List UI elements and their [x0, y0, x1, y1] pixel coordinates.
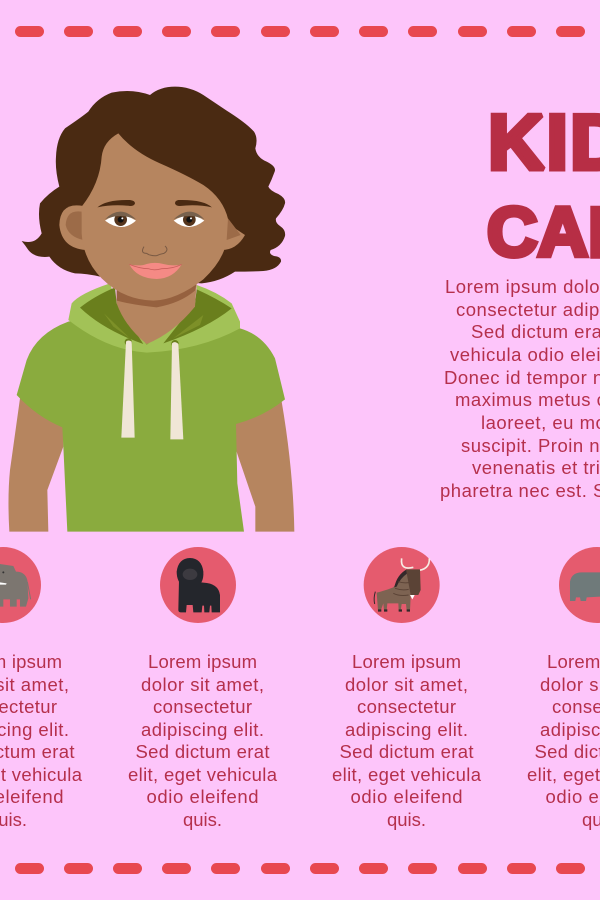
caption: wildebeest: quis. — [387, 809, 426, 830]
caption: gorilla: consectetur — [153, 696, 252, 717]
caption: wildebeest: elit, eget vehicula — [332, 764, 482, 785]
head — [22, 87, 285, 301]
caption: gorilla: dolor sit amet, — [141, 674, 264, 695]
caption: elephant — [0, 651, 83, 830]
caption: wildebeest: Lorem ipsum — [352, 651, 461, 672]
bottom dashed border — [15, 863, 585, 874]
caption: wildebeest: adipiscing elit. — [345, 719, 468, 740]
icon: gorilla — [160, 547, 236, 623]
caption: gorilla: Sed dictum erat — [136, 741, 270, 762]
caption: wildebeest: odio eleifend — [350, 786, 462, 807]
title — [487, 98, 600, 271]
torso and arms — [8, 283, 294, 532]
icon: hippo — [559, 547, 600, 623]
caption: gorilla: Lorem ipsum — [148, 651, 257, 672]
caption: gorilla: odio eleifend — [146, 786, 258, 807]
intro paragraph — [440, 276, 600, 501]
icon: wildebeest — [364, 547, 440, 623]
caption: wildebeest: Sed dictum erat — [340, 741, 474, 762]
caption: gorilla: adipiscing elit. — [141, 719, 264, 740]
icon: elephant — [0, 547, 41, 623]
caption: wildebeest: dolor sit amet, — [345, 674, 468, 695]
caption: wildebeest: consectetur — [357, 696, 456, 717]
caption: gorilla: quis. — [183, 809, 222, 830]
child illustration — [8, 87, 294, 532]
top dashed border — [15, 26, 585, 37]
caption: wildebeest — [332, 651, 482, 830]
caption: gorilla — [128, 651, 278, 830]
caption: gorilla: elit, eget vehicula — [128, 764, 278, 785]
caption: hippo — [527, 651, 600, 830]
